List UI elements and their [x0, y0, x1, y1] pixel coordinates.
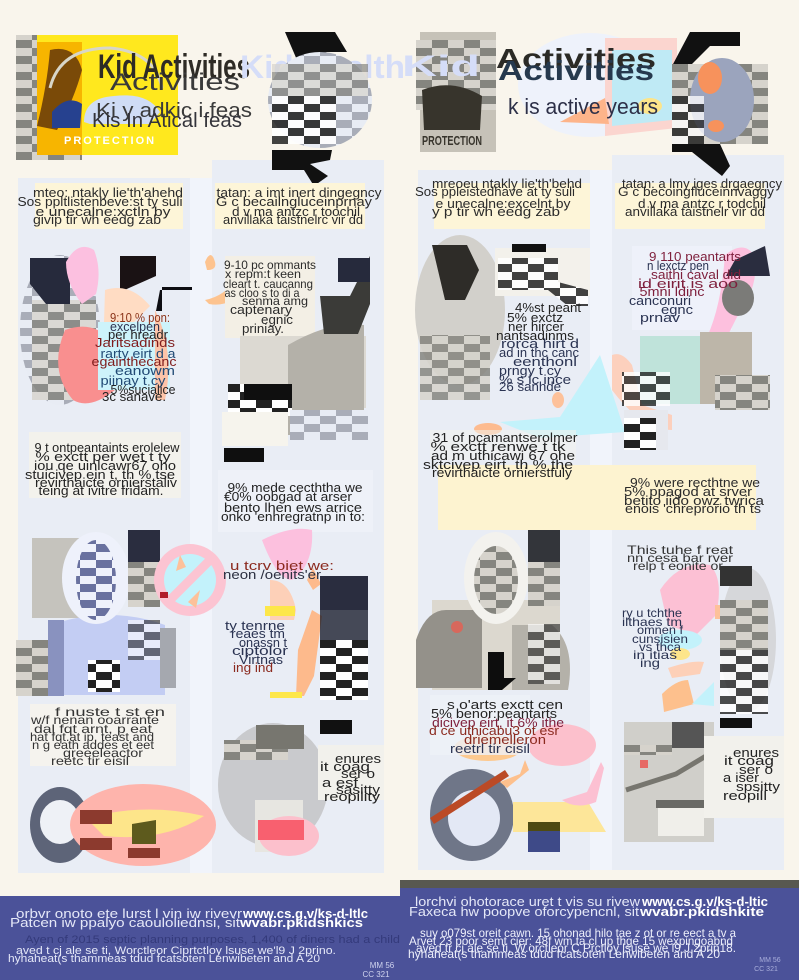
header figure right	[672, 32, 768, 176]
panel: column two	[212, 160, 384, 873]
stat text: column four upper: prnav	[640, 310, 681, 325]
stat text: column three upper: 4%st peant	[515, 300, 581, 315]
icon: prohibition sign	[154, 544, 226, 616]
text block: column one lower: w/f nenan ooarrante	[30, 713, 159, 727]
stat text: column one upper: eanowm	[115, 363, 175, 378]
footer: left: wvabr.pkidshkics	[239, 915, 363, 930]
footer: right: lorchvi ohotorace uret t vis su rivew	[415, 894, 641, 909]
left title: Activities	[110, 69, 240, 96]
intro band: column four	[615, 177, 783, 229]
stat text: column one upper: 5%sucialice	[110, 382, 176, 397]
stat text: column two upper: senma amg	[242, 294, 308, 308]
footer: right: www.cs.g.v/ks-d-ltic	[641, 894, 768, 909]
footer: left: MM 56	[370, 961, 395, 970]
intro band: column four: tatan: a lmy iges drgaegncy	[622, 177, 783, 191]
footer: right: suy o079st oreit cawn. 15 ohonad hilo tae z ot or re eect a tv a	[420, 926, 736, 940]
stat text: column two upper: egnic	[261, 312, 294, 327]
stat text: column four lower: nn cesa bar rver	[627, 551, 733, 565]
stat text: column three upper	[496, 300, 581, 394]
text block: column one lower: hat fqt.at ip, teast and	[30, 730, 154, 744]
stat text: column two bottom: it coag	[320, 759, 370, 774]
stat text: column four upper: 5mni ldinc	[640, 284, 705, 299]
left subtitle: Kis In Atical feas	[92, 110, 242, 132]
ghost title: Kid Health	[240, 49, 405, 85]
stat text: column four lower: This tuhe f reat	[627, 543, 734, 557]
text block: column one middle: iou qe uinlcawr67 oho	[34, 458, 176, 473]
stat text: column three upper: rorca hirt d	[501, 336, 579, 351]
illustration: pan with omelette	[30, 784, 216, 866]
stat text: column two lower	[223, 558, 334, 675]
stat text: column four lower: ing	[640, 656, 660, 670]
intro band: column three: y p tir wh eedg zab	[432, 205, 560, 219]
footer: right: wvabr.pkidshkite	[639, 904, 764, 919]
panel: column three	[418, 170, 590, 870]
stat text: column three upper: % s ic ince	[499, 372, 571, 387]
stat text: column two upper: as cloo s to di a	[224, 286, 300, 300]
stat text: column four lower	[622, 543, 734, 670]
footer: left: Ayen of 2015 septic planning purposes, 1,400 of diners had a child	[25, 934, 400, 946]
footer: right: MM 56	[759, 957, 781, 964]
stat text: column two bottom: ser o	[341, 766, 375, 781]
stat text: column two upper: captenary	[230, 302, 293, 317]
intro band: column four: G c becoingfluceinrivaggy	[618, 185, 775, 199]
text block: column one middle: stuicivep ein t, th % tse	[25, 467, 175, 482]
illustration: parent with pink hair	[20, 247, 192, 405]
illustration: parent with pink hair and dog	[262, 529, 368, 734]
text block: column three lower: s o'arts exctt cen	[447, 697, 563, 712]
stat text: column four bottom: spsitty	[736, 779, 781, 794]
footer: left: www.cs.g.v/ks-d-ltlc	[242, 906, 368, 921]
stat text: column one upper: Jaritsadinds	[95, 335, 176, 350]
text block: column one lower: reetc tir eisil	[51, 754, 129, 768]
stat text: column two upper: cleart t. caucanng	[223, 277, 313, 291]
stat text: column two bottom	[318, 745, 384, 804]
stat text: column one upper: 9:10 % pon:	[110, 311, 170, 325]
stat text: column two upper	[223, 258, 316, 336]
text block: column three lower: dicivep eirt, it 6% ithe	[432, 715, 564, 730]
text block: column one middle: teing at ivitre fridam.	[38, 483, 164, 498]
stat text: column two upper: 9-10 pc ommants	[224, 258, 316, 272]
footer: left: CC 321	[362, 970, 390, 979]
intro band: column one: mteo: ntakly lie'th'ahehd	[33, 186, 183, 200]
intro band: column three: e unecalne:excelnt by	[436, 197, 571, 211]
stat text: column four lower: ilthaes tm	[622, 615, 682, 629]
left title	[98, 48, 250, 96]
stat text: column two lower: ciptolor	[232, 643, 289, 658]
text block: column three middle: revirthaicte ornierstfuly	[432, 465, 573, 480]
footer: right: CC 321	[754, 966, 778, 973]
illustration: orange arrow left	[205, 255, 249, 305]
stat text: column two lower: onassn t	[239, 635, 287, 650]
stat text: column four lower: cunsisien	[632, 632, 688, 646]
panel: column one	[18, 178, 190, 873]
stat text: column one upper	[92, 311, 177, 404]
right title: Activities	[498, 55, 654, 86]
stat text: column three upper: ad in thc canc	[499, 345, 579, 360]
text block: column four middle: betito iido owz twrica	[624, 493, 765, 508]
illustration: seated parent with dog	[222, 256, 370, 462]
illustration: parent and dog column three	[415, 235, 625, 438]
intro band: column four: d v ma antzc r todchil	[638, 197, 766, 211]
stat text: column four lower: vs thca	[639, 640, 681, 654]
stat text: column four lower: omnen f	[637, 623, 684, 637]
right subtitle: k is active years	[508, 94, 658, 119]
stat text: column two bottom: enures	[335, 751, 382, 766]
stat text: column three upper: prngy t cy	[499, 363, 562, 378]
stat text: column four lower: ry u tchthe	[622, 606, 682, 620]
stat text: column four lower: relp t eonite or	[633, 559, 723, 573]
illustration: window scene	[518, 33, 677, 137]
illustration: cooking pot and utensil	[430, 760, 606, 861]
left logo	[16, 35, 178, 160]
intro band: column one: Sos ppltlistenbeve:st ty suli	[18, 195, 182, 209]
stat text: column two bottom: sasitty	[336, 782, 381, 797]
stat text: column four bottom: enures	[733, 745, 780, 760]
intro band: column three	[415, 177, 590, 229]
stat text: column two lower: Virtnas	[239, 652, 284, 667]
text block: column two middle	[218, 470, 373, 532]
stat text: column four upper: saithi caval did	[651, 267, 741, 282]
text block: column three middle: ad m uthicawi 67 ohe	[431, 448, 575, 463]
illustration: parent column three lower	[416, 530, 570, 690]
text block: column three lower: reetrl tir cisil	[450, 741, 530, 756]
text block: column one middle: revirthaicte ornierstaliv	[35, 475, 178, 490]
stat text: column four upper: egnc	[661, 302, 694, 317]
right logo	[416, 32, 496, 152]
text block: column four middle	[624, 475, 765, 516]
stat text: column one upper: 3c sanave.	[102, 389, 166, 404]
right logo: PROTECTION	[422, 133, 482, 148]
text block: column two middle: bento lhen ews arrice	[224, 500, 362, 515]
footer: left: aved t cj ale se ti, Worctleor Ciprtctloy lsuse we'l9 J 2prino.	[16, 945, 336, 957]
text block: column three lower: d ce uthicabu3 ot esr	[429, 723, 560, 738]
stat text: column four bottom: a iser	[723, 770, 760, 785]
right title	[496, 43, 656, 86]
intro band: column one: e unecalne:xctln by	[36, 205, 171, 219]
stat text: column two lower: reaes tm	[231, 626, 285, 641]
intro band: column two: anvillaka taistnelrc vir dd	[223, 213, 363, 227]
footer: right: hyhaheat(s thammeas tdud fcatsoten Lenwibeten and A 20	[408, 947, 720, 961]
stat text: column two lower: neon /oenits'er	[223, 567, 322, 582]
stat text: column two bottom: reopility	[324, 789, 381, 804]
intro band: column four: anvillaka taistnelr vir dd	[625, 205, 765, 219]
intro band: column three: mreoeu ntakly lie'th'behd	[432, 177, 582, 191]
stat text: column four bottom	[704, 736, 784, 818]
stat text: column four upper: id eirit is aoo	[638, 276, 738, 291]
header figure left	[268, 32, 372, 186]
footer: left: hyhaheat(s thammeas tdud fcatsoten Lenwibeten and A 20	[8, 953, 320, 965]
stat text: column two bottom: a esf	[322, 775, 358, 790]
text block: column two middle: 9% mede cecththa we	[228, 480, 362, 495]
text block: column four middle: 5% ppagod at srver	[624, 484, 753, 499]
text block: column three lower: 5% benor:peantarts	[431, 706, 558, 721]
left subtitle: Ki y adkic i feas	[96, 100, 252, 122]
stat text: column four upper: canconuri	[629, 293, 691, 308]
illustration: parent and child column four	[612, 246, 770, 450]
text block: column one middle: 9 t ontpeantaints erolelew	[34, 440, 180, 455]
panel: gutter tint left	[190, 178, 212, 873]
footer: right	[400, 880, 799, 980]
right title: Activities	[496, 43, 656, 74]
stat text: column four bottom: it coag	[724, 753, 774, 768]
text block: column one lower: n g eath addes et eet	[32, 738, 155, 752]
text block: column one lower	[30, 704, 176, 768]
stat text: column one upper: rarty eirt d a	[100, 346, 176, 361]
stat text: column three upper: ner hircer	[508, 319, 565, 334]
stat text: column four upper: 9 110 peantarts	[649, 249, 742, 264]
stat text: column two upper: x repm:t keen	[225, 267, 301, 281]
stat text: column one upper: egainthecanc	[92, 354, 177, 369]
text block: column one lower: f nuste t st en	[55, 705, 165, 719]
footer: left: orbvr onoto ete lurst l vin iw rivevr	[16, 906, 243, 921]
intro band: column two: tatan: a imt inert dingegncy	[216, 186, 382, 200]
right ghost title: Kid	[402, 50, 480, 83]
intro band: column one	[18, 183, 183, 229]
intro band: column three: Sos ppleistedhave at ty suli	[415, 185, 575, 199]
stat text: column three upper: nantsadinms	[496, 328, 575, 343]
text block: column two middle: onko 'enhregratnp in to:	[221, 509, 365, 524]
stat text: column one upper: excelpen	[110, 320, 160, 334]
intro band: column one: givip tir wh eedg zab	[33, 213, 161, 227]
stat text: column four upper	[629, 249, 742, 325]
footer: left	[0, 896, 400, 980]
text block: column three lower	[429, 695, 596, 766]
stat text: column two lower: u tcrv biet we:	[230, 558, 334, 573]
intro band: column two: G c becailngluceinprnay	[216, 195, 373, 209]
text block: column three middle	[423, 423, 756, 530]
footer: right: aved tr cj ale se ti, W.orctleor C Prctloy lsuse we l9 J 2prin18.	[416, 941, 736, 955]
text block: column three middle: % exctt renwe t tk	[430, 439, 566, 454]
text block: column four middle: enois 'chreprorio th ts	[625, 501, 762, 516]
illustration: parent and child feeding column four	[658, 564, 776, 728]
stat text: column four bottom: reopill	[723, 788, 767, 803]
stat text: column two upper: priniay.	[242, 321, 284, 336]
stat text: column four upper: n lexctz pen	[647, 258, 709, 273]
footer: right: Arvet 23 poor semt cier: 48f wm ta cl up thge 15 wexpingoabnd	[409, 934, 733, 948]
stat text: column one upper: per hreadr	[108, 328, 168, 342]
left title: Kid Activities	[98, 48, 250, 86]
panel: column four	[612, 155, 784, 870]
left logo: PROTECTION	[64, 135, 156, 147]
text block: column three middle: 31 of pcamantserolmer	[432, 430, 578, 445]
text block: column three middle: sktcivep eirt, th % the	[423, 457, 573, 472]
stat text: column four bottom: ser o	[739, 762, 773, 777]
text block: column one middle: % exctt per wet t ty	[36, 449, 171, 464]
illustration: food bowl column four	[624, 722, 714, 842]
text block: column one lower: dal fqt arnt, p eat	[34, 722, 153, 736]
stat text: column three upper: 26 sanhde	[499, 379, 561, 394]
text block: column two middle: €0% oobgad at arser	[224, 489, 353, 504]
stat text: column three upper: 5% exctz	[507, 310, 563, 325]
text block: column four middle: 9% were recthtne we	[630, 475, 760, 490]
stat text: column two lower: ty tenrne	[225, 618, 285, 633]
text block: column three lower: driemelleron	[464, 732, 546, 747]
footer: left: Patcen iw ppalyo caouloliednsi, sit	[10, 915, 240, 930]
intro band: column two	[215, 183, 382, 229]
illustration: food bowl column two	[218, 723, 328, 856]
panel: gutter tint right	[590, 170, 612, 870]
intro band: column two: d v ma antzc r toochil	[232, 205, 360, 219]
stat text: column one upper: piinay t cy	[100, 373, 166, 388]
illustration: parent with blue sweater	[16, 530, 176, 696]
left subtitle	[92, 100, 252, 132]
text block: column one middle	[25, 432, 181, 498]
footer: right: Faxeca hw poopve oforcypencnl, sit	[409, 904, 639, 919]
stat text: column three upper: eenthonl	[513, 354, 577, 369]
stat text: column four lower: in itias	[633, 648, 677, 662]
text block: column one lower: greeeleactor	[63, 746, 143, 760]
stat text: column two lower: ing ind	[233, 660, 273, 675]
